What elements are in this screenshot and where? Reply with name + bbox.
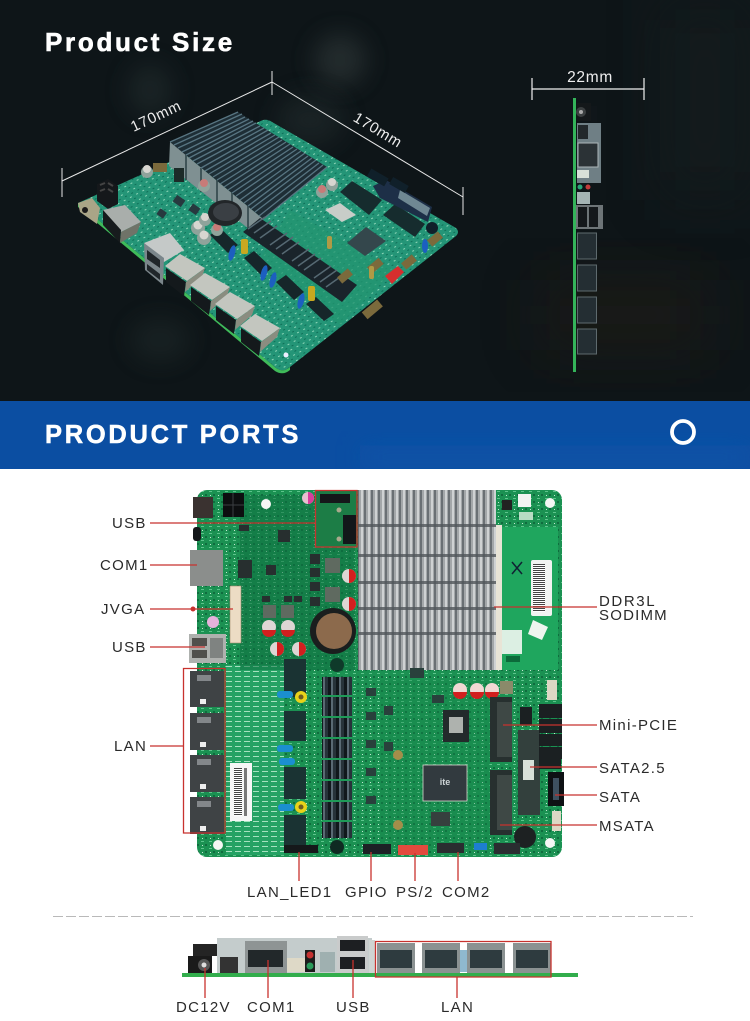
rear LAN ports (377, 943, 551, 973)
callout: DDR3L SODIMM: DDR3L (599, 593, 656, 610)
banner: product ports (0, 401, 750, 469)
LAN port row (165, 254, 280, 356)
small ICs column (366, 668, 444, 804)
callout: rear USB (336, 960, 371, 1016)
LAN side ports (578, 233, 596, 354)
callout: COM2: COM2 (442, 884, 491, 901)
capacitors (141, 165, 338, 245)
SATA connector (548, 772, 564, 806)
callout: DDR3L SODIMM (494, 593, 668, 624)
photo: motherboard side view (573, 98, 603, 372)
photo: motherboard isometric view (78, 112, 458, 373)
callout: PS/2 (396, 853, 434, 901)
inductors (156, 195, 200, 219)
LEDs (577, 170, 590, 190)
callout: COM1: COM1 (100, 557, 149, 574)
ITE super IO chip (423, 765, 467, 801)
small heatsink (243, 217, 357, 302)
callout: rear LAN (376, 942, 551, 1016)
callout: MSATA: MSATA (599, 818, 655, 835)
COM1 connector (245, 941, 287, 973)
mounting holes (213, 498, 555, 850)
coin battery (310, 608, 356, 654)
dimension: board depth 170mm (272, 82, 463, 215)
dimension: board depth 170mm: 170mm (350, 109, 405, 152)
callout: DDR3L SODIMM: SODIMM (599, 607, 668, 624)
board body (78, 120, 458, 370)
red PS/2 connector (385, 266, 404, 284)
photo: motherboard rear IO view (182, 936, 578, 977)
callout: JVGA (101, 601, 233, 618)
callout: SATA2.5: SATA2.5 (599, 760, 666, 777)
callout: JVGA: JVGA (101, 601, 145, 618)
SATA slot (373, 180, 432, 222)
COM RJ45 (103, 205, 141, 243)
power and top left connectors (193, 492, 314, 541)
blue and yellow capacitors (227, 236, 428, 310)
callout: LAN (114, 668, 225, 833)
callout: DC12V (176, 968, 231, 1016)
dual power connector (97, 179, 118, 209)
JVGA connector (230, 586, 241, 643)
callout: USB port (112, 639, 205, 656)
gold standoffs (393, 750, 403, 760)
callout: SATA: SATA (599, 789, 641, 806)
callout: USB header (112, 490, 357, 547)
callout: USB header: USB (112, 515, 147, 532)
top right ICs (502, 494, 533, 520)
LAN controller chips (284, 659, 306, 850)
heading: PRODUCT PORTS: PRODUCT PORTS (45, 421, 301, 449)
bottom headers (284, 843, 520, 855)
large heatsink (169, 112, 327, 240)
title: Product Size: Product Size (45, 27, 235, 57)
callout: COM2 (442, 852, 491, 901)
callout: USB port: USB (112, 639, 147, 656)
SATA 2.5 slot (518, 730, 540, 815)
USB stack (144, 233, 184, 285)
callout: LAN_LED1: LAN_LED1 (247, 884, 332, 901)
DC jack (188, 956, 212, 973)
top right connectors (367, 169, 438, 234)
USB port (189, 634, 226, 663)
dimension: board width 170mm (62, 71, 272, 197)
dimension: board width 170mm: 170mm (128, 97, 184, 136)
serial label (230, 763, 252, 821)
left component zone shading (226, 665, 284, 855)
callout: COM1 (100, 557, 197, 574)
callout: SATA (555, 789, 641, 806)
divider: dashed line (53, 916, 693, 918)
CPU chip (347, 227, 386, 256)
DC jack (78, 198, 100, 224)
callout: LAN: LAN (114, 738, 147, 755)
coin battery (208, 200, 242, 226)
SIM slot (325, 203, 356, 222)
icon: ring (672, 421, 694, 443)
small heatsink (322, 658, 352, 854)
USB header box (316, 491, 357, 547)
SIM slot (443, 710, 469, 742)
LAN ports (190, 671, 224, 834)
blue and yellow capacitors (277, 691, 307, 813)
mini-PCIE and MSATA slots (490, 697, 512, 835)
callout: rear COM1: COM1 (247, 999, 296, 1016)
right bright module (502, 527, 558, 670)
main heatsink (358, 490, 496, 670)
USB stack (576, 205, 603, 229)
front board chips (210, 228, 334, 321)
callout: GPIO: GPIO (345, 884, 388, 901)
callout: DC12V: DC12V (176, 999, 231, 1016)
photo: motherboard top view (189, 490, 564, 857)
USB connector (337, 936, 368, 973)
inductors and ICs (238, 525, 320, 606)
callout: rear LAN: LAN (441, 999, 474, 1016)
callout: SATA2.5 (530, 760, 666, 777)
LEDs (305, 950, 315, 972)
callout: PS/2: PS/2 (396, 884, 434, 901)
callout: rear USB: USB (336, 999, 371, 1016)
callout: Mini-PCIE: Mini-PCIE (599, 717, 678, 734)
callout: rear COM1 (247, 960, 296, 1016)
green chip area (258, 210, 395, 325)
dimension: height 22mm (532, 69, 644, 100)
COM1 port (190, 550, 223, 586)
panel: product size dark background (0, 0, 750, 401)
header pins (153, 163, 443, 319)
mini-PCIE slots (340, 181, 425, 237)
right black connectors (520, 704, 562, 769)
ITE super IO chip: ite (440, 777, 450, 787)
electrolytic capacitors (262, 569, 513, 699)
RJ45 COM port (578, 143, 598, 167)
dimension: height 22mm: 22mm (567, 69, 613, 86)
mounting holes (284, 352, 288, 358)
SODIMM slot (496, 525, 502, 670)
callout: LAN_LED1 (247, 852, 332, 901)
callout: GPIO (345, 852, 388, 901)
